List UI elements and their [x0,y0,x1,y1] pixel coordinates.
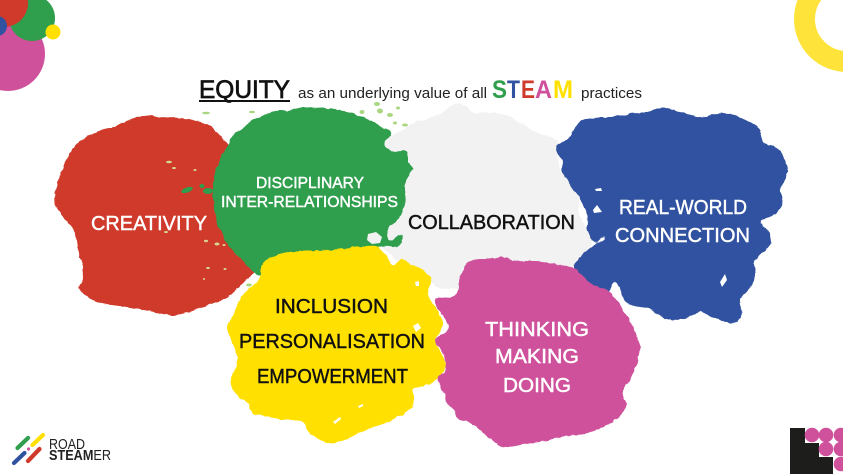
title underline [199,100,290,102]
decoration: bottom-right stair and dots [790,428,843,474]
blob: thinking, making, doing (pink) [433,256,641,448]
title word: STEAM: E [521,76,535,104]
title word: STEAM [492,76,573,104]
title word: EQUITY: EQUITY [199,76,290,104]
logo wordmark: ROAD [49,436,85,453]
label: inclusion, personalisation, empowerment: PERSONALISATION [239,331,425,353]
label: creativity: CREATIVITY [91,213,207,235]
label: real-world connection: REAL-WORLD [619,197,747,219]
blob: creativity (red) [53,115,256,316]
title word: STEAM: A [535,76,552,104]
label: inclusion, personalisation, empowerment: EMPOWERMENT [257,366,408,388]
white gap in green blob [367,232,382,244]
title text: middle: as an underlying value of all [298,85,487,102]
red blob pale speckles [164,161,226,280]
yellow blob small holes [333,281,421,424]
label: inclusion, personalisation, empowerment [239,296,425,388]
label: disciplinary inter-relationships [221,175,398,211]
label: real-world connection [615,197,750,247]
blue blob small holes [593,188,727,287]
paint splash specks above the green blob [202,102,408,286]
label: thinking, making, doing: DOING [503,375,571,397]
blob: disciplinary inter-relationships (green) [212,107,415,279]
label: collaboration: COLLABORATION [408,212,575,234]
title text: practices: practices [581,85,642,102]
decoration: top-left overlapping circles [0,0,60,91]
label: thinking, making, doing [485,319,589,397]
title word: STEAM: S [492,76,507,104]
blob: inclusion, personalisation, empowerment (yellow) [226,246,448,444]
label: real-world connection: CONNECTION [615,225,750,247]
label: thinking, making, doing: THINKING [485,319,589,341]
title word: STEAM: T [507,76,520,104]
label: thinking, making, doing: MAKING [495,346,579,368]
title word: STEAM: M [553,76,573,104]
decoration: top-right yellow ring [804,0,843,62]
logo wordmark second line: STEAMER [49,448,111,464]
label: disciplinary inter-relationships: DISCIPLINARY [256,175,364,192]
red blob green speckles [181,184,213,194]
blob: real-world connection (blue) [556,107,788,323]
logo: Road Steamer [14,435,111,464]
title [199,76,642,104]
blob: collaboration (grey) [375,103,593,289]
logo icon: coloured strokes [14,435,43,463]
label: inclusion, personalisation, empowerment: INCLUSION [275,296,388,318]
label: disciplinary inter-relationships: INTER-RELATIONSHIPS [221,194,398,211]
